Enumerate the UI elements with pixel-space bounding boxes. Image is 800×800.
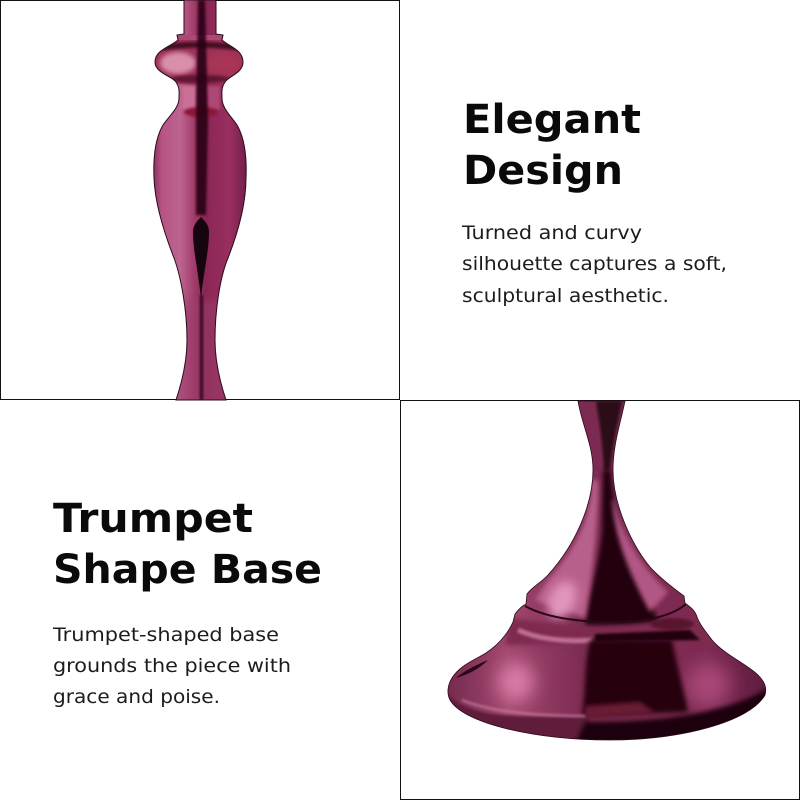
lower stem tone — [176, 301, 224, 400]
panel: trumpet base photo — [400, 400, 800, 800]
heading: Trumpet Shape Base: Shape Base — [53, 547, 322, 593]
skirt highlights — [498, 662, 534, 702]
heading: Trumpet Shape Base: Trumpet — [53, 496, 253, 542]
text block: Trumpet Shape Base description: Trumpet-shaped base — [52, 624, 279, 646]
heading: Trumpet Shape Base — [53, 496, 322, 593]
heading: Elegant Design: Elegant — [463, 97, 641, 143]
text block: Elegant Design description: Turned and curvy — [461, 222, 642, 244]
central skirt dark — [582, 640, 688, 716]
left rim notch — [456, 660, 488, 678]
text block: Elegant Design description: sculptural aesthetic. — [462, 285, 669, 307]
stem and cone highlights — [535, 480, 598, 618]
text block: Trumpet Shape Base description: grace and poise. — [53, 686, 220, 708]
lip of base — [449, 696, 590, 738]
text block: Trumpet Shape Base description: grounds the piece with — [53, 655, 291, 677]
heading: Elegant Design: Design — [463, 148, 623, 194]
stem shading — [578, 401, 625, 470]
bulb shading — [156, 40, 242, 86]
collar — [504, 617, 656, 646]
heading: Elegant Design — [463, 97, 641, 194]
text block: Elegant Design description: silhouette captures a soft, — [462, 253, 727, 275]
text block: Trumpet Shape Base description — [52, 624, 291, 708]
waist — [182, 86, 196, 110]
text block: Elegant Design description — [461, 222, 727, 307]
central dark reflection — [196, 0, 208, 215]
panel: candlestick stem photo — [0, 0, 400, 410]
